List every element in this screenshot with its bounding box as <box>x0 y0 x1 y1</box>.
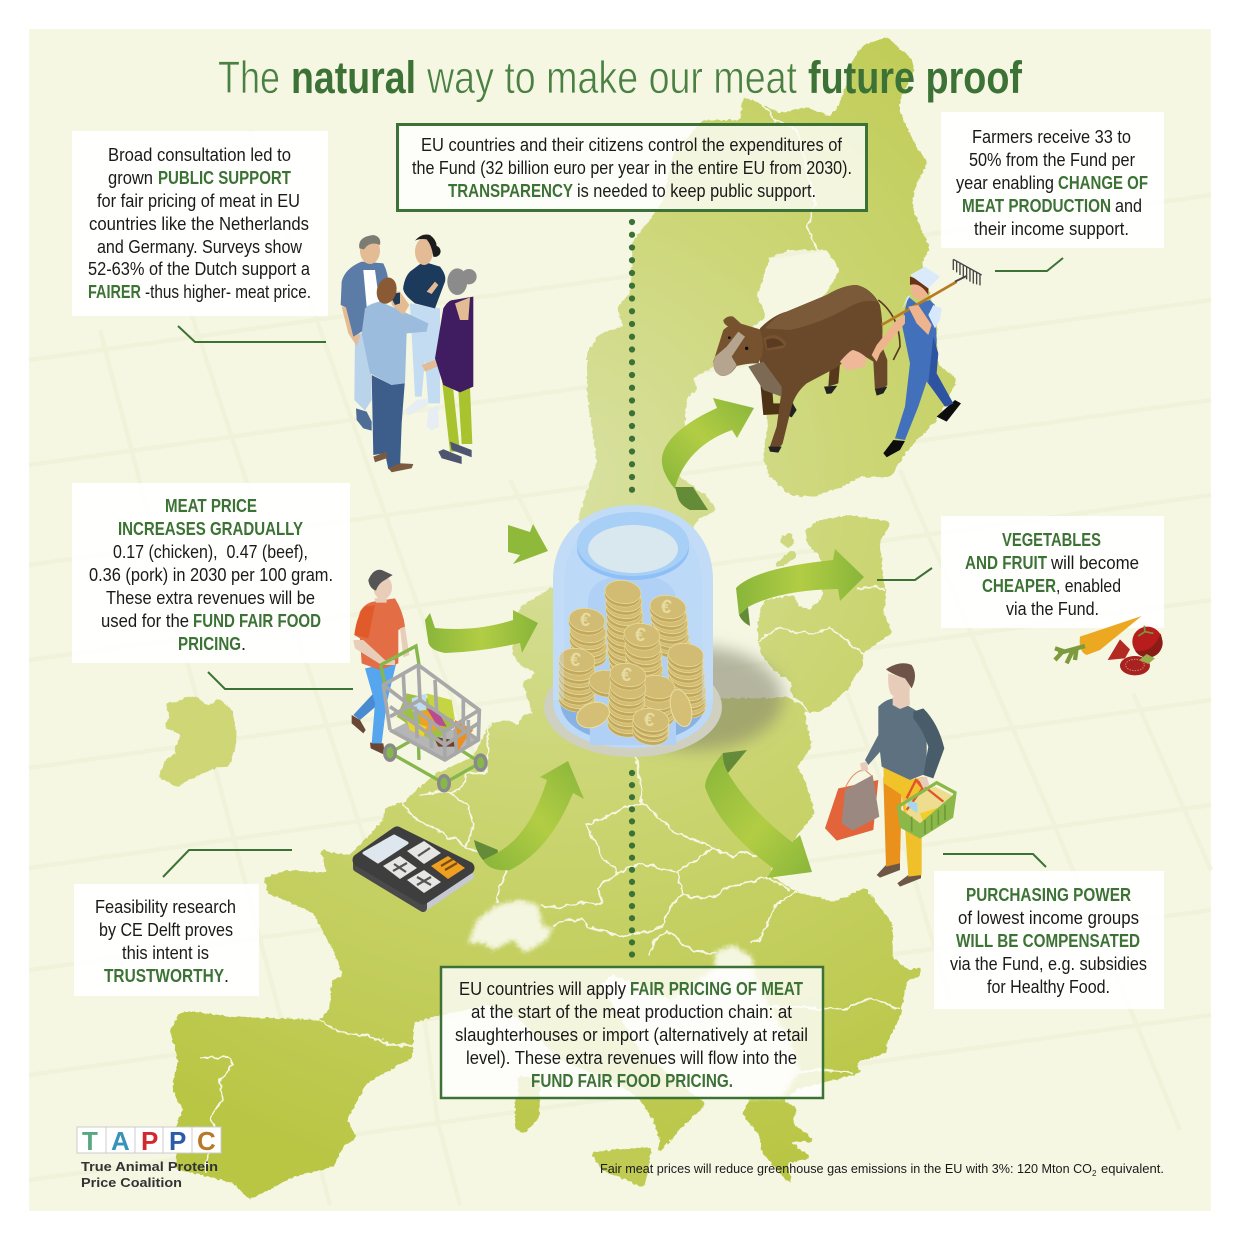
panel: meat price: INCREASES GRADUALLY <box>118 519 303 539</box>
panel: meat price: used for the <box>101 611 189 631</box>
panel: meat price: MEAT PRICE <box>165 496 257 516</box>
leader line: feasibility <box>163 850 292 877</box>
panel: meat price: 0.36 (pork) in 2030 per 100 gram. <box>89 565 333 585</box>
jar shadow <box>607 646 783 750</box>
map: Scandinavia and Finland <box>578 37 957 560</box>
panel: fair pricing of meat: FAIR PRICING OF MEAT <box>630 979 803 999</box>
panel: vegetables: via the Fund. <box>1006 599 1099 619</box>
panel: public support: 52-63% of the Dutch support a <box>88 259 311 279</box>
panel: farmers: Farmers receive 33 to <box>972 127 1131 147</box>
panel: transparency: EU countries and their citizens control the expenditures of <box>421 135 843 155</box>
title <box>218 52 1023 103</box>
panel: meat price: These extra revenues will be <box>106 588 315 608</box>
panel: vegetables: , enabled <box>1056 576 1121 596</box>
panel: fair pricing of meat: EU countries will apply <box>459 979 626 999</box>
panel: meat price <box>72 483 350 663</box>
panel: transparency: TRANSPARENCY <box>448 181 573 201</box>
icon: vegetables <box>1055 616 1163 675</box>
logo: TAPPC: T <box>82 1126 98 1156</box>
panel: farmers: MEAT PRODUCTION <box>962 196 1111 216</box>
panel: meat price: PRICING <box>178 634 241 654</box>
panel: vegetables: will become <box>1050 553 1139 573</box>
panel: farmers: year enabling <box>956 173 1054 193</box>
map: Baltic states <box>757 515 893 712</box>
panel: meat price: 0.17 (chicken), 0.47 (beef), <box>113 542 308 562</box>
euro coin stacks <box>557 578 707 747</box>
map: country borders <box>200 97 900 1173</box>
map: Ireland <box>158 695 237 787</box>
title: future proof <box>808 52 1023 103</box>
panel: feasibility: Feasibility research <box>95 897 236 917</box>
leader line: meat price <box>208 672 353 689</box>
arrow: from shopper <box>425 610 538 653</box>
icon: cow and farmer <box>713 259 982 457</box>
dotted line: bottom <box>629 773 635 956</box>
logo: TAPPC: P <box>169 1126 186 1156</box>
arrow: to consumer <box>705 750 812 878</box>
logo: TAPPC: C <box>197 1126 216 1156</box>
panel: public support: for fair pricing of meat in EU <box>97 191 300 211</box>
panel: public support: grown <box>108 168 153 188</box>
panel: meat price: FUND FAIR FOOD <box>193 611 321 631</box>
leader line: purchasing power <box>943 854 1046 867</box>
panel: public support: FAIRER <box>88 282 141 302</box>
logo: TAPPC: True Animal Protein <box>81 1159 218 1174</box>
panel: feasibility: by CE Delft proves <box>99 920 233 940</box>
euro coin stacks: € <box>620 664 633 686</box>
panel: feasibility: this intent is <box>122 943 209 963</box>
panel: purchasing power: via the Fund, e.g. subsidies <box>950 954 1147 974</box>
panel: farmers: 50% from the Fund per <box>969 150 1135 170</box>
panel: transparency: the Fund (32 billion euro per year in the entire EU from 2030). <box>412 158 852 178</box>
panel: fair pricing of meat: at the start of the meat production chain: at <box>471 1002 792 1022</box>
panel: vegetables <box>941 516 1164 628</box>
euro coin stacks: € <box>579 609 592 631</box>
panel: purchasing power <box>934 871 1164 1009</box>
logo: TAPPC <box>77 1126 221 1190</box>
logo: TAPPC: P <box>141 1126 158 1156</box>
icon: shopper with bags and basket <box>825 663 955 887</box>
map: Switzerland and Balkan gaps <box>468 900 800 1098</box>
footnote: Fair meat prices will reduce greenhouse gas emissions in the EU with 3%: 120 Mton CO <box>600 1161 1092 1176</box>
panel: meat price: . <box>241 634 246 654</box>
title: natural <box>291 52 416 103</box>
arrow: from calculator <box>474 761 584 870</box>
leader line: farmers <box>995 258 1063 271</box>
euro coin stacks: € <box>660 596 673 618</box>
icon: glass jar with euro coins <box>544 505 722 757</box>
panel: fair pricing of meat <box>441 967 823 1098</box>
panel: vegetables: AND FRUIT <box>965 553 1047 573</box>
title: way to make our meat <box>426 52 797 103</box>
panel: vegetables: VEGETABLES <box>1002 530 1101 550</box>
logo: TAPPC: Price Coalition <box>81 1175 182 1190</box>
map: continental Europe <box>170 587 922 1200</box>
map: Sicily <box>590 1147 652 1188</box>
panel: fair pricing of meat: FUND FAIR FOOD PRICING. <box>531 1071 733 1091</box>
panel: purchasing power: for Healthy Food. <box>987 977 1110 997</box>
panel: public support: countries like the Netherlands <box>89 214 309 234</box>
leader line: vegetables <box>877 568 932 580</box>
panel: transparency <box>398 124 866 210</box>
arrow: to farmer <box>662 398 754 510</box>
euro coin stacks: € <box>643 709 656 731</box>
footnote: 2 <box>1092 1169 1097 1178</box>
panel: public support: -thus higher- meat price. <box>145 282 311 302</box>
panel: fair pricing of meat: level). These extra revenues will flow into the <box>466 1048 797 1068</box>
logo: TAPPC: A <box>111 1126 130 1156</box>
arrow: to vegetables <box>736 549 864 626</box>
panel: purchasing power: PURCHASING POWER <box>966 885 1131 905</box>
panel: feasibility: TRUSTWORTHY <box>104 966 224 986</box>
euro coin stacks: € <box>634 624 647 646</box>
panel: farmers: and <box>1115 196 1142 216</box>
euro coin stacks: € <box>569 649 582 671</box>
panel: transparency: is needed to keep public support. <box>577 181 816 201</box>
panel: purchasing power: of lowest income groups <box>958 908 1139 928</box>
panel: fair pricing of meat: slaughterhouses or import (alternatively at retail <box>455 1025 808 1045</box>
arrow: small inflow <box>508 524 548 564</box>
panel: public support: Broad consultation led to <box>108 145 291 165</box>
panel: farmers <box>941 112 1164 248</box>
panel: farmers: CHANGE OF <box>1058 173 1148 193</box>
title: The <box>218 52 280 103</box>
dotted line: top <box>629 222 635 491</box>
panel: farmers: their income support. <box>974 219 1129 239</box>
footnote: equivalent. <box>1101 1161 1164 1176</box>
map of Europe <box>158 37 957 1200</box>
leader line: public support <box>178 326 326 342</box>
panel: feasibility <box>74 884 259 996</box>
icon: shopper with trolley <box>352 570 488 793</box>
panel: purchasing power: WILL BE COMPENSATED <box>956 931 1140 951</box>
panel: public support: PUBLIC SUPPORT <box>158 168 291 188</box>
panel: public support <box>72 131 328 316</box>
icon: calculator <box>357 833 470 908</box>
panel: feasibility: . <box>224 966 229 986</box>
map: Sardinia and Corsica <box>515 1076 540 1134</box>
icon: group of people <box>341 234 477 472</box>
panel: public support: and Germany. Surveys show <box>97 237 303 257</box>
panel: vegetables: CHEAPER <box>982 576 1056 596</box>
